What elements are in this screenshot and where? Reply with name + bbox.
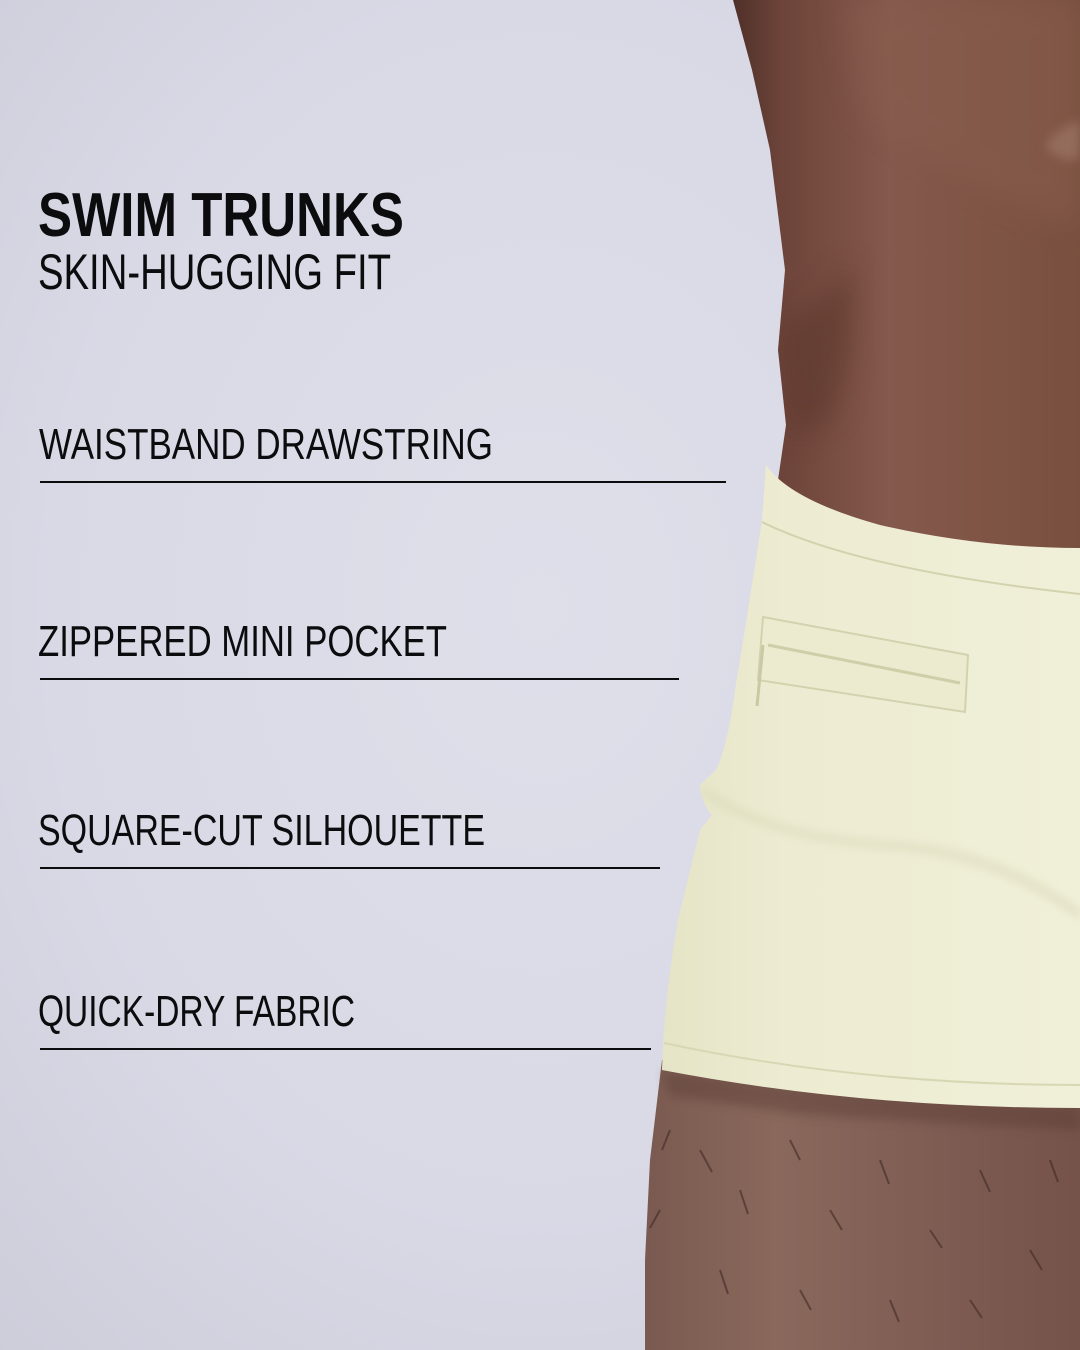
feature: quick-dry fabric: QUICK-DRY FABRIC (38, 987, 355, 1036)
subtitle: SKIN-HUGGING FIT (38, 244, 391, 300)
zippered mini pocket (757, 617, 968, 712)
title: SWIM TRUNKS (38, 181, 404, 250)
feature: waistband drawstring: WAISTBAND DRAWSTRING (39, 420, 493, 469)
feature: square-cut silhouette: SQUARE-CUT SILHOUETTE (38, 806, 485, 855)
photo: leg (645, 1060, 1080, 1350)
photo: torso (733, 0, 1080, 600)
photo: cream swim trunks (662, 465, 1080, 1108)
feature: zippered mini pocket: ZIPPERED MINI POCKET (38, 617, 447, 666)
